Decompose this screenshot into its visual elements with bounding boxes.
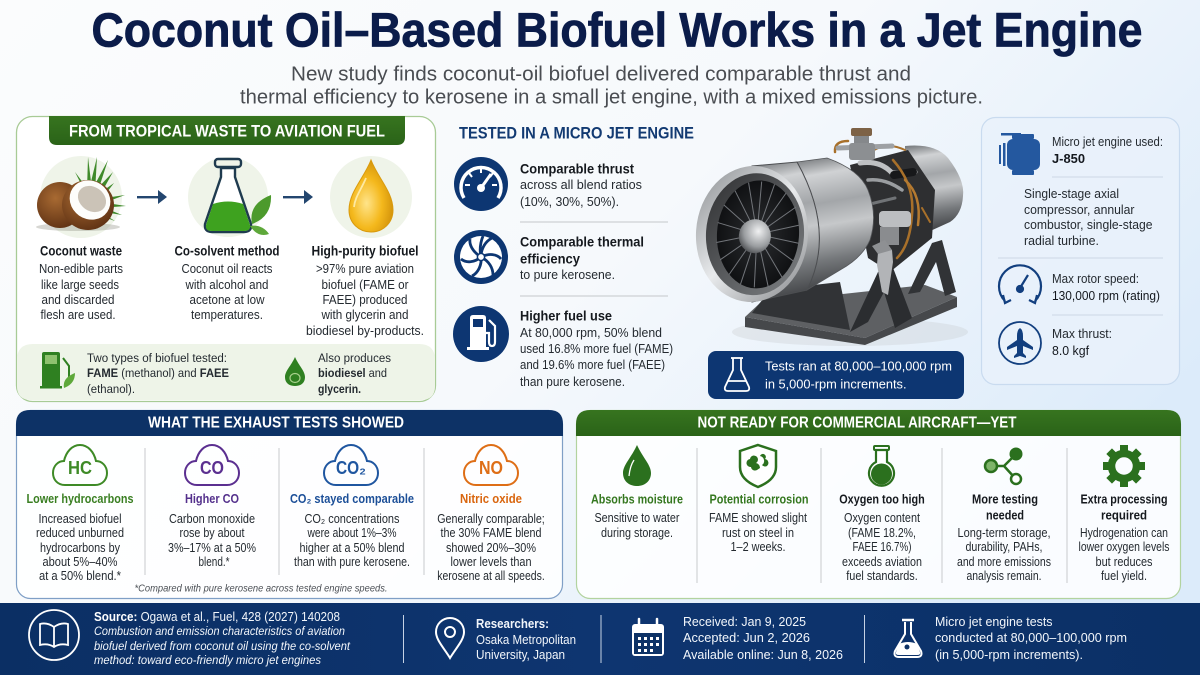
column: oxygen too high: FAEE 16.7%) xyxy=(852,540,912,554)
column: carbon dioxide: were about 1%–3% xyxy=(307,526,396,540)
source: biofuel derived from coconut oil using the co-solvent xyxy=(94,641,351,653)
subtitle: thermal efficiency to kerosene in a small jet engine, with a mixed emissions picture. xyxy=(240,86,983,108)
column: carbon monoxide: rose by about xyxy=(180,526,245,540)
column: hydrocarbons: Lower hydrocarbons xyxy=(26,492,134,506)
strip: biofuel types: Two types of biofuel tested: xyxy=(87,351,227,365)
dates: Available online: Jun 8, 2026 xyxy=(683,648,843,662)
item: higher fuel use: than pure kerosene. xyxy=(520,375,625,389)
arrow xyxy=(283,190,313,204)
spec: engine description: compressor, annular xyxy=(1024,203,1134,217)
subtitle: New study finds coconut-oil biofuel delivered comparable thrust and xyxy=(291,62,911,86)
item: comparable thermal efficiency: to pure kerosene. xyxy=(520,268,615,282)
icon: oil drop xyxy=(330,156,412,238)
column: more testing needed: Long-term storage, xyxy=(958,526,1050,540)
column: carbon monoxide: Higher CO xyxy=(185,492,239,506)
column: more testing needed: More testing xyxy=(972,492,1038,506)
panel heading: WHAT THE EXHAUST TESTS SHOWED xyxy=(148,414,404,432)
column: nitric oxide xyxy=(437,445,545,583)
step: coconut waste: like large seeds xyxy=(41,278,119,292)
column: carbon monoxide xyxy=(168,445,256,569)
column: potential corrosion: 1–2 weeks. xyxy=(730,540,786,554)
item: comparable thrust: across all blend ratios xyxy=(520,178,642,192)
column: potential corrosion: rust on steel in xyxy=(722,526,794,540)
item: comparable thrust xyxy=(520,162,642,209)
panel heading xyxy=(16,410,563,436)
icon: turbine xyxy=(454,230,508,284)
footer band xyxy=(0,603,1200,675)
column: hydrocarbons: hydrocarbons by xyxy=(40,541,121,555)
icon: flask xyxy=(725,358,749,391)
icon: green drop xyxy=(285,357,305,386)
icon: NO cloud: NO xyxy=(479,458,503,478)
heading: TESTED IN A MICRO JET ENGINE xyxy=(459,124,694,142)
column: carbon dioxide: than with pure kerosene. xyxy=(294,555,410,569)
researchers: University, Japan xyxy=(476,648,565,662)
footnote: *Compared with pure kerosene across tested engine speeds. xyxy=(134,584,388,594)
spec: rotor speed: 130,000 rpm (rating) xyxy=(1052,289,1160,303)
panel heading xyxy=(576,410,1181,436)
callout: test speeds xyxy=(708,351,964,399)
item: higher fuel use xyxy=(520,308,673,389)
strip: biofuel types: biodiesel and xyxy=(318,366,387,380)
icon: CO2 cloud: CO₂ xyxy=(336,458,366,478)
column: hydrocarbons: Increased biofuel xyxy=(38,512,122,526)
column: extra processing required: Hydrogenation can xyxy=(1080,526,1168,540)
column: more testing needed: durability, PAHs, xyxy=(966,540,1042,554)
column: carbon dioxide: higher at a 50% blend xyxy=(300,541,405,555)
column: oxygen too high xyxy=(839,446,925,583)
dates: Accepted: Jun 2, 2026 xyxy=(683,631,810,645)
spec: engine description xyxy=(1024,187,1153,248)
step: coconut waste: flesh are used. xyxy=(40,308,116,322)
spec: rotor speed: Max rotor speed: xyxy=(1052,272,1139,286)
column: nitric oxide: Nitric oxide xyxy=(460,492,522,506)
step: co-solvent method: with alcohol and xyxy=(185,278,269,292)
item: comparable thermal efficiency xyxy=(520,234,644,282)
column: carbon dioxide: CO₂ concentrations xyxy=(304,512,400,526)
icon: thrust gauge xyxy=(454,157,508,211)
engine main casing xyxy=(797,158,874,290)
spec: max thrust: 8.0 kgf xyxy=(1052,344,1090,358)
panel heading: FROM TROPICAL WASTE TO AVIATION FUEL xyxy=(69,122,385,140)
column: absorbs moisture: Absorbs moisture xyxy=(591,492,683,506)
step: high-purity biofuel: FAEE) produced xyxy=(322,293,408,307)
callout: test speeds: Tests ran at 80,000–100,000 rpm xyxy=(765,358,952,374)
column: nitric oxide: lower levels than xyxy=(450,555,532,569)
icon: HC cloud: HC xyxy=(68,458,92,478)
fan blades xyxy=(713,179,803,290)
engine rear casing xyxy=(905,146,963,232)
step: co-solvent method: Coconut oil reacts xyxy=(182,262,272,276)
spec: max thrust: Max thrust: xyxy=(1052,327,1112,341)
spec: engine used: Micro jet engine used: xyxy=(1052,135,1163,149)
strip: biofuel types: Also produces xyxy=(318,351,391,365)
step: high-purity biofuel: biodiesel by-products. xyxy=(306,324,424,338)
source: method: toward eco-friendly micro jet engines xyxy=(94,655,321,667)
spec: rotor speed xyxy=(1052,272,1160,303)
item: comparable thermal efficiency: efficiency xyxy=(520,252,580,266)
column: absorbs moisture xyxy=(591,445,683,540)
spec: engine used xyxy=(1052,135,1163,166)
column: oxygen too high: Oxygen content xyxy=(844,511,920,525)
engine test note: Micro jet engine tests xyxy=(935,615,1052,629)
spec: engine description: Single-stage axial xyxy=(1024,187,1119,201)
strip: biofuel types: (ethanol). xyxy=(87,382,135,396)
column: more testing needed: analysis remain. xyxy=(966,569,1042,583)
step: coconut waste: Coconut waste xyxy=(40,244,122,258)
engine top fitting xyxy=(838,128,892,160)
icon: water drop xyxy=(623,445,651,486)
step: co-solvent method: Co-solvent method xyxy=(174,244,280,258)
researchers: Osaka Metropolitan xyxy=(476,633,576,647)
callout: test speeds: in 5,000-rpm increments. xyxy=(765,376,906,392)
column: carbon dioxide: CO₂ stayed comparable xyxy=(290,492,414,506)
researchers: Researchers: xyxy=(476,617,549,631)
column: carbon monoxide: 3%–17% at a 50% xyxy=(168,541,256,555)
icon: molecule xyxy=(985,448,1022,484)
item: comparable thrust: (10%, 30%, 50%). xyxy=(520,195,619,209)
strip: biofuel types: FAME (methanol) and FAEE xyxy=(87,366,229,380)
column: extra processing required xyxy=(1078,436,1170,583)
column: absorbs moisture: Sensitive to water xyxy=(594,511,680,525)
spec: engine description: combustor, single-stage xyxy=(1024,218,1153,232)
pipes and fittings xyxy=(835,141,930,258)
icon: coconut xyxy=(36,156,126,238)
spec: engine description: radial turbine. xyxy=(1024,234,1099,248)
column: carbon dioxide xyxy=(290,445,414,569)
icon: flask xyxy=(894,620,922,657)
panel: not ready for commercial aircraft xyxy=(576,410,1181,598)
column: extra processing required: required xyxy=(1101,508,1147,522)
icon: CO cloud: CO xyxy=(200,458,224,478)
engine base xyxy=(732,240,968,346)
step: co-solvent method: temperatures. xyxy=(191,308,263,322)
step: coconut waste: and discarded xyxy=(42,293,115,307)
engine test note: conducted at 80,000–100,000 rpm xyxy=(935,631,1127,645)
step: co-solvent method xyxy=(174,244,280,322)
title: Coconut Oil–Based Biofuel Works in a Jet Engine xyxy=(92,4,1142,58)
step: high-purity biofuel: biofuel (FAME or xyxy=(322,278,408,292)
column: more testing needed xyxy=(957,448,1051,583)
dates: Received: Jan 9, 2025 xyxy=(683,615,806,629)
dates xyxy=(632,615,843,662)
spec: engine used: J-850 xyxy=(1052,152,1085,166)
arrow xyxy=(137,190,167,204)
column: oxygen too high: exceeds aviation xyxy=(842,555,922,569)
column: nitric oxide: kerosene at all speeds. xyxy=(437,569,545,583)
step: high-purity biofuel xyxy=(306,244,424,338)
column: carbon monoxide: blend.* xyxy=(198,555,230,569)
icon: flask xyxy=(188,157,271,237)
source xyxy=(29,610,351,667)
column: extra processing required: fuel yield. xyxy=(1101,569,1147,583)
source: Source: Ogawa et al., Fuel, 428 (2027) 140208 xyxy=(94,610,340,624)
panel: what the exhaust tests showed xyxy=(16,410,563,598)
icon: fuel pump xyxy=(453,306,509,362)
step: high-purity biofuel: >97% pure aviation xyxy=(316,262,414,276)
column: potential corrosion: Potential corrosion xyxy=(710,492,809,506)
item: comparable thermal efficiency: Comparable thermal xyxy=(520,234,644,250)
step: high-purity biofuel: High-purity biofuel xyxy=(312,244,418,258)
column: hydrocarbons: about 5%–40% xyxy=(42,555,118,569)
column: potential corrosion xyxy=(709,445,809,554)
item: higher fuel use: used 16.8% more fuel (FAME) xyxy=(520,342,673,356)
jet engine illustration xyxy=(691,128,968,346)
strip: biofuel types: glycerin. xyxy=(318,382,361,396)
icon: open book xyxy=(29,610,79,660)
column: hydrocarbons xyxy=(26,445,134,583)
item: comparable thrust: Comparable thrust xyxy=(520,162,634,176)
column: hydrocarbons: reduced unburned xyxy=(36,526,124,540)
researchers xyxy=(436,617,576,662)
icon: calendar xyxy=(632,619,664,656)
panel: from tropical waste to aviation fuel xyxy=(16,116,436,402)
column: hydrocarbons: at a 50% blend.* xyxy=(39,569,121,583)
column: more testing needed: and more emissions xyxy=(957,555,1051,569)
step: coconut waste xyxy=(39,244,123,322)
engine intake cowl xyxy=(752,162,819,302)
item: higher fuel use: At 80,000 rpm, 50% blend xyxy=(520,326,662,340)
engine test note xyxy=(894,615,1127,662)
strip: biofuel types xyxy=(17,344,435,400)
icon: plane xyxy=(999,322,1041,364)
panel: engine specs xyxy=(982,118,1180,384)
panel: tested in a micro jet engine xyxy=(453,124,694,389)
column: oxygen too high: (FAME 18.2%, xyxy=(848,526,916,540)
icon: micro engine xyxy=(999,133,1040,175)
spec: max thrust xyxy=(1052,327,1112,358)
column: nitric oxide: the 30% FAME blend xyxy=(440,526,542,540)
engine test note: (in 5,000-rpm increments). xyxy=(935,648,1083,662)
column: oxygen too high: fuel standards. xyxy=(846,569,918,583)
column: extra processing required: but reduces xyxy=(1096,555,1152,569)
source: Combustion and emission characteristics of aviation xyxy=(94,626,345,638)
engine intake xyxy=(691,162,813,306)
icon: map pin xyxy=(436,618,464,658)
icon: green fuel pump xyxy=(40,352,75,388)
icon: gear xyxy=(1094,436,1154,496)
column: more testing needed: needed xyxy=(986,508,1024,522)
icon: corroded shield xyxy=(740,445,776,487)
subtitle xyxy=(240,62,983,108)
column: oxygen too high: Oxygen too high xyxy=(839,492,925,506)
column: carbon monoxide: Carbon monoxide xyxy=(169,512,255,526)
step: co-solvent method: acetone at low xyxy=(190,293,265,307)
panel heading: NOT READY FOR COMMERCIAL AIRCRAFT—YET xyxy=(698,414,1017,432)
column: absorbs moisture: during storage. xyxy=(601,526,673,540)
column: nitric oxide: Generally comparable; xyxy=(437,512,545,526)
engine core xyxy=(835,141,935,295)
icon: speed gauge xyxy=(999,265,1041,303)
item: higher fuel use: and 19.6% more fuel (FAEE) xyxy=(520,358,665,372)
panel heading xyxy=(49,116,405,145)
column: extra processing required: Extra processing xyxy=(1080,492,1168,506)
item: higher fuel use: Higher fuel use xyxy=(520,308,612,324)
icon: round flask xyxy=(869,446,894,486)
column: nitric oxide: showed 20%–30% xyxy=(446,541,536,555)
step: high-purity biofuel: with glycerin and xyxy=(321,308,409,322)
step: coconut waste: Non-edible parts xyxy=(39,262,123,276)
column: potential corrosion: FAME showed slight xyxy=(709,511,807,525)
column: extra processing required: lower oxygen levels xyxy=(1078,540,1170,554)
